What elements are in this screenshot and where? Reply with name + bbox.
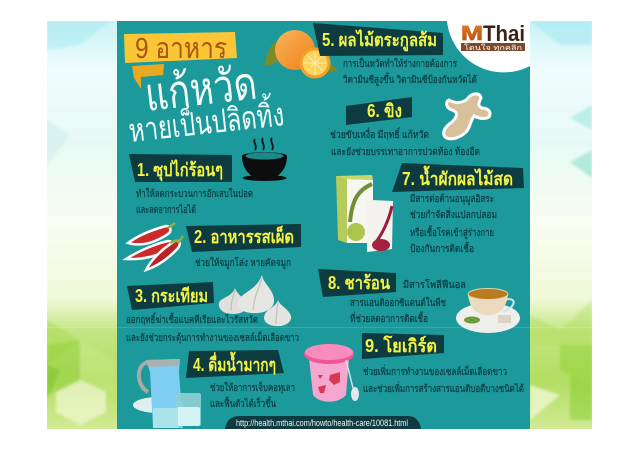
item 7 text: มีสารต่อต้านอนุมูลอิสระ xyxy=(410,193,494,205)
item 8 text: ที่ช่วยลดอาการติดเชื้อ xyxy=(350,311,428,325)
icon: water jug and glass xyxy=(133,359,201,428)
item 8 heading xyxy=(318,269,396,297)
item 7 heading: 7. น้ำผักผลไม้สด xyxy=(402,165,513,189)
logo Thai wordmark: Thai xyxy=(483,21,525,46)
item 3 text: และยังช่วยกระตุ้นการทำงานของเซลล์เม็ดเลือดขาว xyxy=(126,330,299,344)
item 1 text: และลดอาการไอได้ xyxy=(136,204,196,216)
source URL bar xyxy=(225,416,421,429)
item 6 text xyxy=(330,127,480,158)
title: แก้หวัด: แก้หวัด xyxy=(142,57,259,121)
panel: teal background xyxy=(117,21,530,429)
item 7 text xyxy=(410,193,497,255)
source URL bar: http://health.mthai.com/howto/health-care/10081.html xyxy=(236,418,408,428)
icon: chillies xyxy=(126,223,183,270)
logo badge xyxy=(447,21,530,72)
item 6 heading: 6. ขิง xyxy=(367,101,402,121)
item 9 text: ช่วยเพิ่มการทำงานของเซลล์เม็ดเลือดขาว xyxy=(363,364,507,378)
item 8 heading: 8. ชาร้อน xyxy=(328,273,391,293)
item 1 heading: 1. ซุปไก่ร้อนๆ xyxy=(137,159,223,182)
item 4 text: ช่วยให้อาการเจ็บคอทุเลา xyxy=(210,380,295,394)
logo M mark: M xyxy=(461,23,483,45)
icon: cup of tea xyxy=(456,288,520,333)
item 4 text xyxy=(210,380,295,410)
panel: right decorative strip xyxy=(530,21,592,429)
item 8 text xyxy=(350,278,466,325)
logo tagline: โดนใจ ทุกคลิก xyxy=(464,43,522,52)
item 7 heading xyxy=(392,163,524,192)
icon: juice cartons xyxy=(336,175,393,252)
item 9 text xyxy=(363,364,524,395)
icon: strawberry yogurt cup xyxy=(304,344,359,402)
icon: oranges xyxy=(264,30,338,78)
item 5 text: วิตามินซีสูงขึ้น วิตามินซีป้องกันหวัดได้ xyxy=(343,72,477,86)
item 3 heading xyxy=(127,282,214,310)
icon: garlic xyxy=(219,275,291,326)
item 5 text xyxy=(343,56,477,86)
item 4 text: และฟื้นตัวได้เร็วขึ้น xyxy=(210,396,276,410)
item 5 text: การเป็นหวัดทำให้ร่างกายต้องการ xyxy=(343,56,457,70)
title: หายเป็นปลิดทิ้ง: หายเป็นปลิดทิ้ง xyxy=(126,91,286,149)
item 1 text: ทำให้ลดกระบวนการอักเสบในปอด xyxy=(136,188,253,200)
item 1 text xyxy=(136,188,253,216)
item 1 heading xyxy=(129,154,232,182)
item 2 heading: 2. อาหารรสเผ็ด xyxy=(194,225,294,247)
item 2 text: ช่วยให้จมูกโล่ง หายคัดจมูก xyxy=(195,256,291,269)
item 8 text: มีสารโพลีฟีนอล xyxy=(403,278,466,291)
item 6 text: และยังช่วยบรรเทาอาการปวดท้อง ท้องอืด xyxy=(331,146,480,158)
item 5 heading xyxy=(313,23,443,56)
item 8 text: สารแอนติออกซิแดนต์ในพืช xyxy=(350,297,446,309)
item 6 text: ช่วยขับเหงื่อ มีฤทธิ์ แก้หวัด xyxy=(330,127,429,141)
item 7 text: ช่วยกำจัดสิ่งแปลกปลอม xyxy=(410,207,497,221)
item 6 heading xyxy=(346,97,412,125)
item 7 text: หรือเชื้อโรคเข้าสู่ร่างกาย xyxy=(410,225,494,239)
icon: hot soup bowl xyxy=(242,138,287,181)
item 3 heading: 3. กระเทียม xyxy=(135,286,208,306)
item 9 text: และช่วยเพิ่มการสร้างสารแอนติบอดีบางชนิดได้ xyxy=(363,381,524,395)
item 4 heading xyxy=(186,350,284,378)
item 3 text xyxy=(126,312,299,344)
panel: left decorative strip xyxy=(47,21,117,429)
icon: ginger xyxy=(444,94,490,139)
item 2 heading xyxy=(186,224,301,252)
title banner: 9 อาหาร xyxy=(124,32,237,89)
item 3 text: ออกฤทธิ์ฆ่าเชื้อแบคทีเรียและไวรัสหวัด xyxy=(126,312,258,326)
item 5 heading: 5. ผลไม้ตระกูลส้ม xyxy=(322,29,437,52)
title banner: 9 อาหาร: 9 อาหาร xyxy=(135,33,227,65)
item 7 text: ป้องกันการติดเชื้อ xyxy=(410,241,474,255)
item 9 heading: 9. โยเกิร์ต xyxy=(365,335,437,356)
item 4 heading: 4. ดื่มน้ำมากๆ xyxy=(193,351,276,375)
